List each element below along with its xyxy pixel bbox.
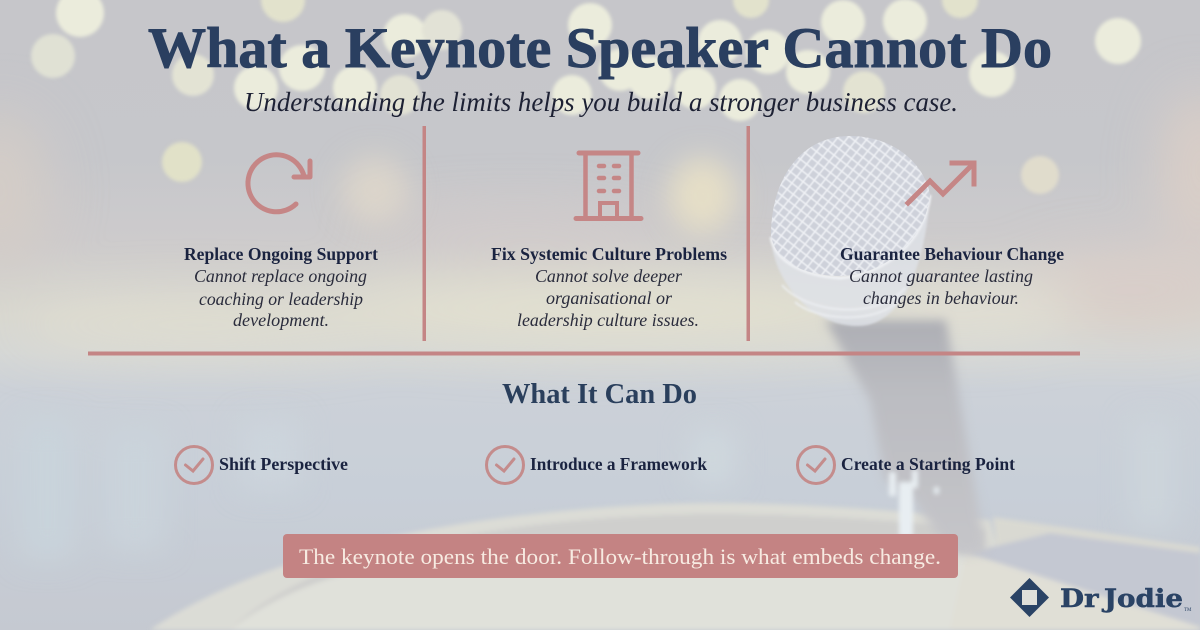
subtitle: Understanding the limits helps you build a stronger business case. [244,87,958,117]
description: replace ongoing support: coaching or leadership [199,289,363,309]
logo: Dr Jodie [1010,578,1192,617]
icon: check circle [176,446,212,484]
icon: diamond logo mark [1010,578,1049,617]
icon: check circle [486,446,524,484]
description: replace ongoing support [194,266,367,330]
description: guarantee behaviour change [849,266,1033,308]
title: What a Keynote Speaker Cannot Do [148,17,1052,80]
heading: what it can do: What It Can Do [502,378,697,410]
column divider left [422,126,426,341]
description: fix systemic culture problems: Cannot solve deeper [535,266,682,286]
item: shift perspective [176,446,348,484]
label: create a starting point: Create a Starting Point [841,454,1015,474]
horizontal divider [88,352,1080,356]
podium and table surfaces [150,503,1200,630]
label: shift perspective: Shift Perspective [219,454,348,474]
microphone handle [825,320,986,556]
logo: Dr Jodie: Dr Jodie [1060,584,1183,613]
microphone stand clip [889,470,939,537]
heading: guarantee behaviour change: Guarantee Behaviour Change [840,244,1064,264]
description: guarantee behaviour change: changes in behaviour. [863,288,1019,308]
description: fix systemic culture problems: leadership culture issues. [517,310,699,330]
callout banner [283,534,958,578]
item: introduce a framework [486,446,707,484]
icon: office building [576,153,641,218]
label: introduce a framework: Introduce a Framework [530,454,707,474]
item: create a starting point [798,446,1015,484]
heading: fix systemic culture problems: Fix Systemic Culture Problems [491,244,727,264]
description: fix systemic culture problems: organisational or [546,288,672,308]
icon: refresh arrow [248,155,310,212]
panel: guarantee behaviour change [840,163,1064,308]
logo: Dr Jodie: TM [1184,608,1192,613]
callout banner: The keynote opens the door. Follow-through is what embeds change. [299,544,941,569]
column divider right [746,126,750,341]
microphone head mesh [771,136,930,276]
description: replace ongoing support: development. [233,310,329,330]
heading: replace ongoing support: Replace Ongoing Support [184,244,378,264]
icon: trending up arrow [908,163,974,203]
description: fix systemic culture problems [517,266,699,330]
microphone collar [771,195,930,326]
panel: fix systemic culture problems [491,153,727,330]
description: replace ongoing support: Cannot replace ongoing [194,266,367,286]
description: guarantee behaviour change: Cannot guarantee lasting [849,266,1033,286]
panel: replace ongoing support [184,155,378,330]
icon: check circle [798,446,834,484]
